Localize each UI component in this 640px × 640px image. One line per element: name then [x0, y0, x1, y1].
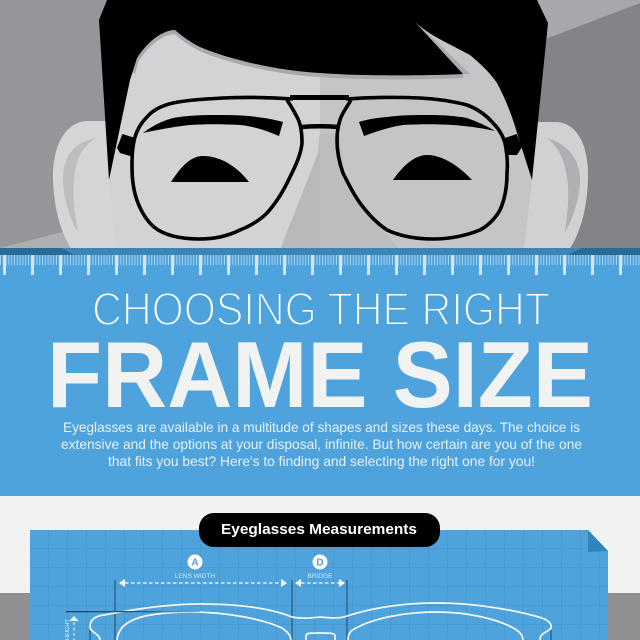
left ear	[53, 121, 125, 250]
title line 2: FRAME SIZE	[47, 322, 593, 427]
ruler ticks	[0, 260, 640, 265]
right eye	[393, 155, 472, 180]
face	[109, 20, 532, 250]
ruler shadow	[0, 248, 640, 255]
blueprint panel	[30, 530, 608, 640]
right ear	[515, 122, 588, 250]
measurement A: lens width: A	[191, 558, 199, 568]
eyeglasses	[122, 97, 517, 239]
height marker line	[66, 611, 200, 612]
intro paragraph: extensive and the options at your disposal, infinite. But how certain are you of the one	[61, 436, 582, 452]
folded corner	[588, 530, 608, 552]
fringe highlight sliver	[415, 22, 470, 74]
intro paragraph: that fits you best? Here's to finding and selecting the right one for you!	[108, 453, 535, 469]
intro paragraph	[61, 419, 582, 469]
hair shadow	[133, 32, 463, 77]
height arrow: HEIGHT	[65, 619, 71, 640]
section heading pill	[199, 513, 440, 547]
measurement D: bridge: BRIDGE	[308, 573, 333, 580]
title line 1: CHOOSING THE RIGHT	[92, 283, 550, 335]
height arrow	[65, 616, 78, 640]
measurement A: lens width: LENS WIDTH	[175, 573, 215, 580]
measurement D: bridge: D	[316, 558, 324, 568]
intro paragraph: Eyeglasses are available in a multitude of shapes and sizes these days. The choice is	[63, 419, 580, 435]
lower section background	[0, 496, 640, 640]
right temple hinge	[505, 135, 522, 155]
measurement D: bridge	[295, 554, 345, 587]
hair	[99, 0, 548, 180]
right eyebrow	[359, 115, 495, 136]
glasses outline	[90, 603, 551, 640]
measurement guide lines	[90, 580, 551, 640]
left temple hinge	[117, 135, 135, 156]
left eye	[171, 156, 249, 182]
blue title band	[0, 248, 640, 496]
left eyebrow	[143, 115, 283, 136]
section heading pill: Eyeglasses Measurements	[221, 521, 417, 538]
portrait header	[0, 0, 640, 250]
background wall	[0, 0, 640, 250]
measurement A: lens width	[119, 554, 287, 587]
